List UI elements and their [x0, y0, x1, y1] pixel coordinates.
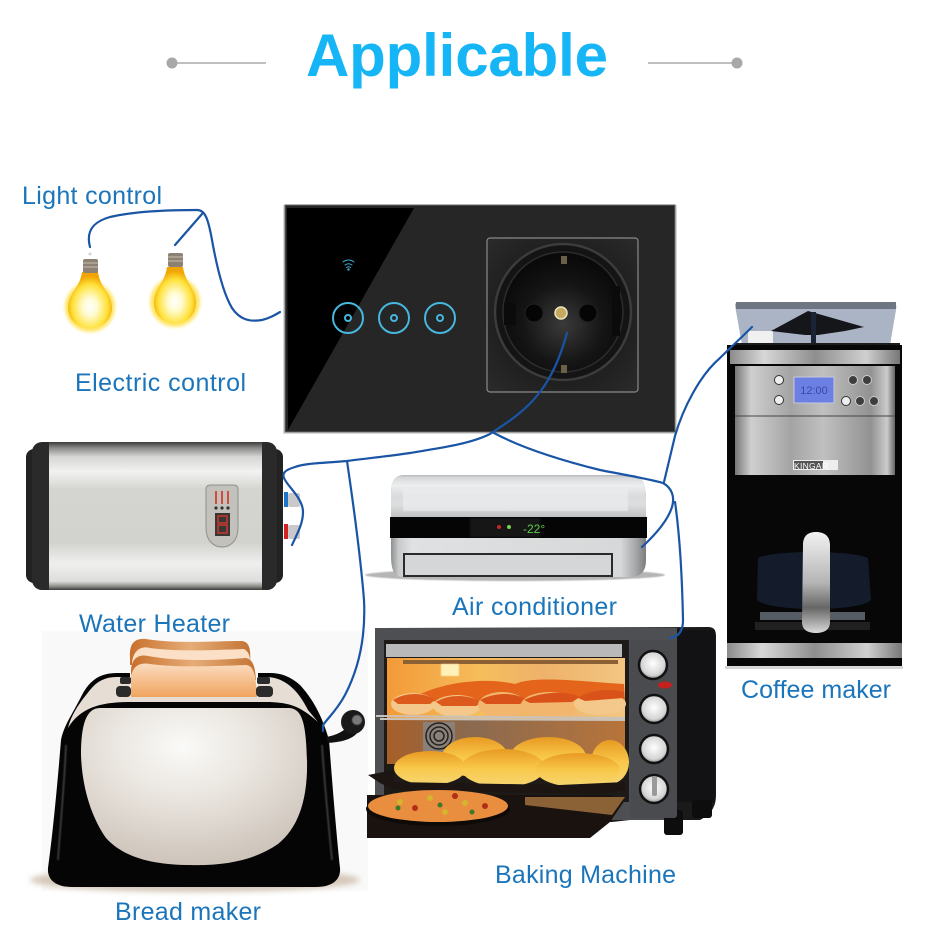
oven top steel	[386, 644, 622, 657]
title rule: right	[648, 58, 742, 68]
oven rack	[376, 716, 625, 720]
coffee maker brand: KINGAR	[794, 461, 828, 471]
icon: coffee maker	[725, 302, 903, 669]
oven upper interior	[387, 658, 625, 720]
coffee carafe	[755, 532, 871, 633]
toaster background	[42, 631, 368, 891]
toaster body	[48, 673, 340, 887]
wire: second bulb	[175, 214, 202, 245]
wires	[89, 210, 752, 731]
toaster top cream	[68, 677, 318, 728]
coffee maker buttons	[774, 376, 878, 406]
air conditioner display band	[390, 517, 647, 538]
label: coffee maker: Coffee maker	[741, 676, 891, 704]
glass reflection	[287, 208, 414, 430]
coffee maker base shadow	[725, 666, 903, 669]
bread slices	[130, 639, 257, 697]
icon: water heater	[26, 442, 300, 590]
icon: oven	[366, 627, 716, 838]
heater body	[49, 442, 262, 590]
touch buttons	[333, 303, 455, 333]
oven pizza	[366, 790, 510, 826]
coffee maker body	[727, 345, 902, 667]
label: light control: Light control	[22, 182, 162, 210]
wire: air conditioner	[494, 433, 673, 547]
icon: wifi	[343, 260, 354, 270]
bean hopper	[735, 302, 900, 350]
icon: bread maker	[30, 639, 365, 892]
air conditioner temperature: -22°	[523, 522, 545, 536]
label: baking machine: Baking Machine	[495, 861, 676, 889]
coffee maker lcd: 12:00	[800, 385, 828, 397]
label: electric control: Electric control	[75, 369, 246, 397]
air conditioner vent	[403, 553, 613, 577]
oven window frame	[384, 640, 629, 802]
oven indicator lamp	[658, 682, 672, 688]
icon: air conditioner	[365, 475, 665, 581]
steel top band	[730, 350, 900, 364]
air conditioner housing	[391, 475, 646, 577]
icon: bulb right	[147, 253, 203, 330]
wire: toaster branch	[323, 461, 364, 731]
oven control panel	[630, 640, 677, 818]
steel control section	[735, 366, 895, 475]
air conditioner leds	[497, 525, 511, 529]
title: Applicable	[306, 22, 608, 89]
wire: oven	[670, 502, 683, 638]
heater pipes	[284, 492, 300, 539]
heater display	[206, 485, 238, 547]
wire: coffee maker	[664, 327, 752, 482]
steel base	[727, 643, 902, 658]
oven body	[375, 627, 716, 822]
wire: socket to water heater	[283, 333, 567, 545]
title	[0, 0, 930, 90]
heater end caps	[26, 449, 283, 583]
panel: smart switch with socket	[283, 205, 677, 434]
coffee maker lcd	[794, 377, 834, 403]
toaster front panel	[81, 708, 307, 865]
socket	[487, 238, 638, 392]
label: water heater: Water Heater	[79, 610, 230, 638]
oven lower interior	[387, 720, 625, 764]
toaster lever	[326, 710, 365, 743]
icon: bulb left	[62, 252, 118, 335]
label: bread maker: Bread maker	[115, 898, 261, 926]
title rule: left	[166, 58, 266, 68]
oven fan	[423, 722, 455, 752]
oven knobs	[639, 651, 668, 803]
glass frame	[283, 205, 677, 434]
air conditioner shadow	[365, 569, 665, 581]
oven buns	[394, 737, 629, 787]
oven feet	[664, 800, 712, 835]
coffee maker brand	[793, 460, 838, 471]
label: air conditioner: Air conditioner	[452, 593, 617, 621]
oven tray	[368, 770, 625, 794]
wire: light control	[89, 210, 280, 321]
toaster highlights	[58, 745, 332, 860]
oven lower door	[367, 795, 625, 838]
oven pizza rolls	[391, 680, 626, 718]
oven knob pointer	[652, 776, 657, 796]
